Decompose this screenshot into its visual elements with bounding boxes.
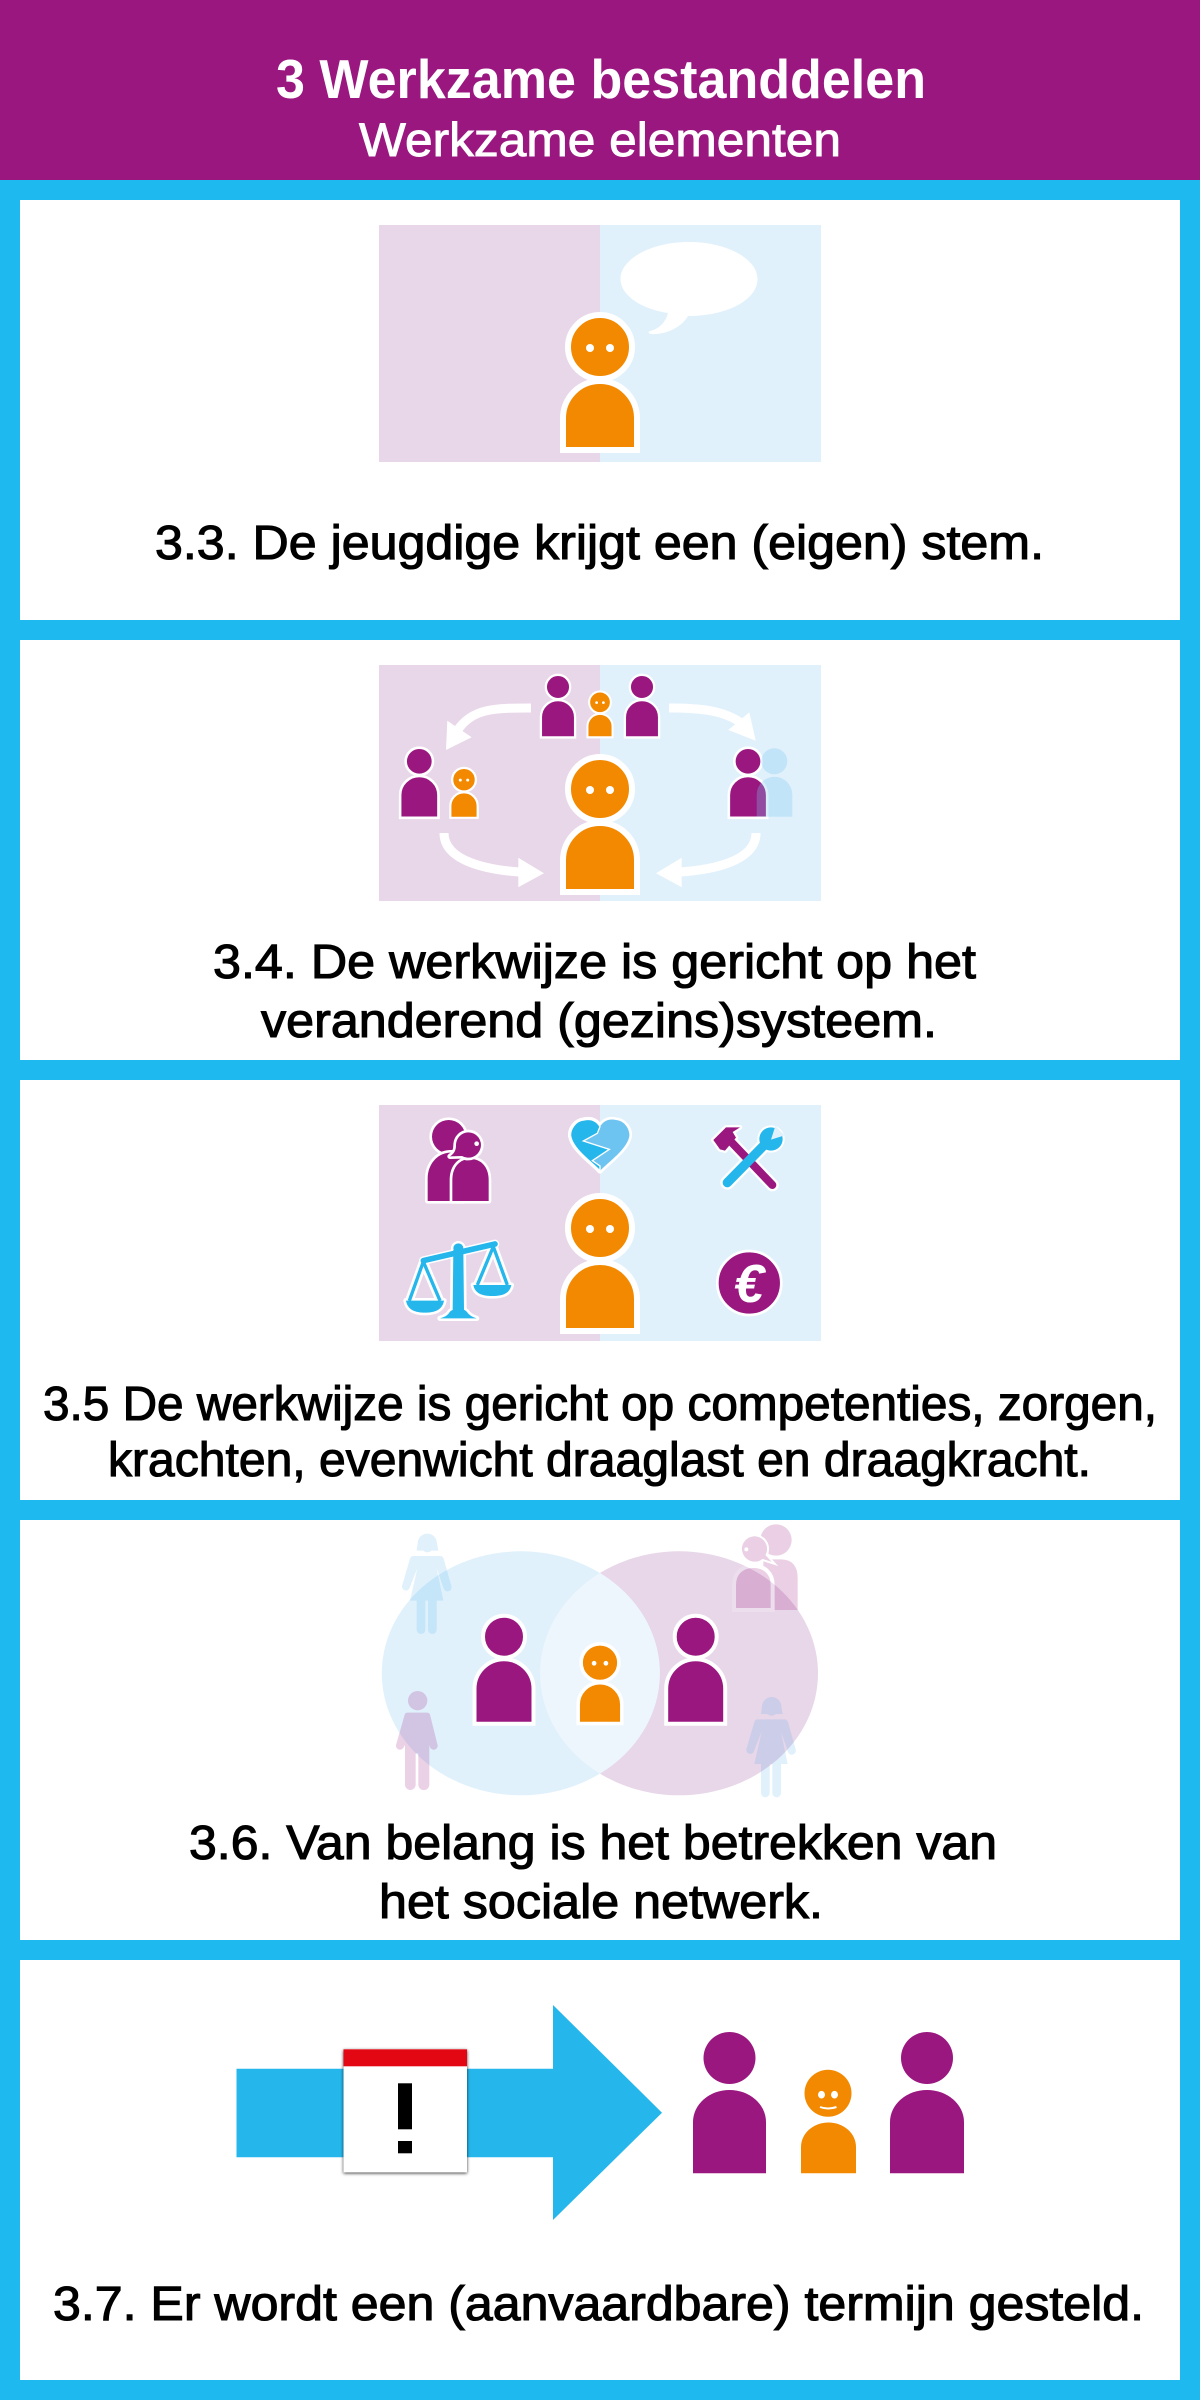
illustration background [379,225,821,462]
caption: veranderend (gezins)systeem. [261,995,937,1048]
icon: faded woman bottom right [746,1697,796,1797]
icon: smiling child [801,2070,856,2173]
caption [189,1817,997,1929]
venn diagram [382,1551,818,1795]
arrow: bottom right [656,833,756,887]
icon: hammer and wrench [713,1125,785,1185]
icon: euro coin [717,1251,781,1315]
arrow: blue [236,2005,662,2220]
illustration background [379,1105,821,1341]
icon: balance scales [406,1241,511,1318]
icon: top family [541,675,659,737]
caption: krachten, evenwicht draaglast en draagkracht. [108,1434,1091,1487]
icon: orange child [578,1644,622,1723]
panel: 3.7 deadline [20,1960,1180,2380]
icon: speech bubble [620,242,758,334]
icon: orange child [563,315,637,450]
caption: 3.4. De werkwijze is gericht op het [213,936,976,989]
arrow: top right [669,708,756,741]
arrow: top left [446,708,531,750]
caption [213,936,976,1048]
caption: 3.5 De werkwijze is gericht op competenties, zorgen, [43,1378,1157,1431]
panel: 3.4 changing family system [20,640,1180,1060]
caption [43,1378,1157,1487]
panel: 3.6 social network [20,1520,1180,1940]
icon: right parent [666,1616,725,1724]
caption: 3.3. De jeugdige krijgt een (eigen) stem. [155,517,1044,570]
illustration background [379,665,821,901]
caption: 3.6. Van belang is het betrekken van [189,1817,997,1870]
icon: couple talking [428,1120,489,1201]
panel: 3.3 own voice [20,200,1180,620]
icon: faded couple top right [734,1524,798,1610]
subtitle: Werkzame elementen [359,113,841,166]
icon: faded woman top left [402,1534,452,1634]
icon: orange child [563,757,637,892]
icon: orange child [563,1196,637,1331]
caption: het sociale netwerk. [379,1876,823,1929]
caption: 3.7. Er wordt een (aanvaardbare) termijn gesteld. [53,2278,1144,2331]
title: 3 Werkzame bestanddelen [276,48,926,110]
icon: euro coin: € [734,1254,766,1314]
icon: right parent with faded partner [729,748,792,818]
icon: left parent [693,2032,766,2173]
icon: faded man bottom left [396,1691,438,1790]
icon: calendar with exclamation mark [344,2049,467,2172]
panel: 3.5 competencies, care, strengths, balance [20,1080,1180,1500]
icon: left parent and child [400,748,478,818]
header [0,0,1200,180]
arrow: bottom left [444,833,544,887]
icon: right parent [890,2032,964,2173]
icon: left parent [474,1616,534,1724]
icon: broken heart [571,1120,629,1171]
